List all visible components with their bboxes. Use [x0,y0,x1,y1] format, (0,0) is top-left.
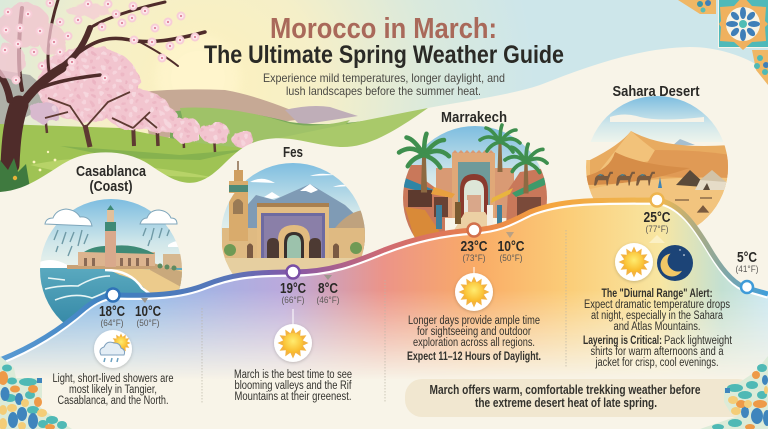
title block [204,13,564,98]
connector lines [293,267,474,324]
subtitle: Experience mild temperatures, longer daylight, and [263,71,505,85]
heading: Fes: Fes [283,145,303,161]
text: Marrakech note: Expect 11–12 Hours of Daylight. [407,351,541,363]
temperatures: Fes: 8°C [318,281,338,297]
temperatures: Marrakech: 10°C [498,239,525,255]
text: Sahara note: Expect dramatic temperature drops [584,299,730,311]
small pointers [141,232,514,303]
icon: sun, Fes [274,324,312,362]
temperatures: Casablanca: (64°F) [100,318,124,328]
route nodes [106,194,753,302]
corner mosaic: bottom left [0,356,72,429]
temperatures: Sahara: 5°C [737,250,757,266]
subtitle [263,71,505,98]
temperatures: Sahara: 25°C [644,210,671,226]
temperatures: Sahara [644,210,758,274]
text: Sahara note: shirts for warm afternoons and a [590,346,724,358]
temperatures: Fes [280,281,340,305]
route line [0,200,768,362]
location headings [76,84,700,195]
illustration: Casablanca [40,199,182,322]
temperatures: Fes: (66°F) [282,295,304,305]
text: Fes note: March is the best time to see [234,369,352,381]
dotted dividers [202,230,566,403]
text: Sahara note: Pack lightweight [664,335,733,347]
temperatures: Casablanca: (50°F) [136,318,160,328]
title line 2: The Ultimate Spring Weather Guide [204,41,564,69]
text: Sahara note [583,288,733,369]
icon: crescent moon [657,245,693,281]
text: Casablanca note [52,373,174,407]
temperatures: Marrakech: (73°F) [462,253,486,263]
minaret top: Fes [229,161,248,193]
callout banner: the extreme desert heat of late spring. [475,395,657,410]
rolling green hills [0,108,430,200]
temperatures: Sahara: (77°F) [646,224,668,234]
clouds: Casablanca [45,209,177,226]
text: Sahara note: jacket for crisp, cool evenings. [595,357,718,369]
heading: Casablanca [76,164,147,195]
heading: Sahara Desert: Sahara Desert [612,84,700,100]
temperatures: Casablanca [99,304,161,328]
text: Sahara note: at night, especially in the Sahara [591,310,723,322]
text: Marrakech note: exploration across all regions. [413,337,535,349]
colour wash [7,204,768,374]
text: Marrakech note: Longer days provide ample time [408,315,540,327]
temperatures: Casablanca: 10°C [135,304,161,320]
corner tile: top right [678,0,768,85]
title line 1: Morocco in March: [270,13,497,45]
temperatures: Fes: 19°C [280,281,306,297]
illustration: Marrakech [403,126,547,245]
text: Marrakech note [407,315,541,363]
blossom trees in the distance [30,46,254,152]
text: Sahara note: The "Diurnal Range" Alert: [602,288,712,300]
palm trees: Marrakech [399,125,547,194]
icon: sun, Sahara [615,243,653,281]
icon: cloud with sun and rain [94,330,132,368]
heading: Marrakech: Marrakech [441,110,507,126]
corner mosaic: bottom right [700,356,768,429]
text: Casablanca note: Casablanca, and the North. [58,395,168,407]
text: Marrakech note: for sightseeing and outdoor [417,326,531,338]
temperatures: Fes: (46°F) [316,295,340,305]
text: Fes note: Mountains at their greenest. [234,391,352,403]
text: Fes note: blooming valleys and the Rif [234,380,352,392]
heading: Casablanca: (Coast) [90,179,133,195]
distant mountains [0,70,358,140]
text: Casablanca note: most likely in Tangier, [69,384,157,396]
grass and flowers [0,151,56,195]
temperatures: Marrakech [460,239,525,263]
illustration: Fes [221,163,365,274]
text: Fes note [234,369,352,403]
illustration: Sahara [586,96,728,226]
pale sun [156,36,240,120]
callout banner [405,379,755,417]
text: Sahara note: and Atlas Mountains. [614,321,700,333]
cream panel beneath the route line [0,200,768,429]
heading: Casablanca: Casablanca [76,164,147,180]
temperatures: Marrakech: 23°C [460,239,488,255]
text: Sahara note: Layering is Critical: [583,335,662,347]
main almond tree [0,0,205,165]
hero landscape illustration [0,0,430,200]
subtitle: lush landscapes before the summer heat. [286,84,481,98]
temperatures: Casablanca: 18°C [99,304,125,320]
icon: sun, Marrakech [455,273,493,311]
text: Casablanca note: Light, short-lived showers are [52,373,174,385]
temperatures: Sahara: (41°F) [736,264,758,274]
callout banner: March offers warm, comfortable trekking weather before [430,382,700,397]
temperatures: Marrakech: (50°F) [500,253,522,263]
